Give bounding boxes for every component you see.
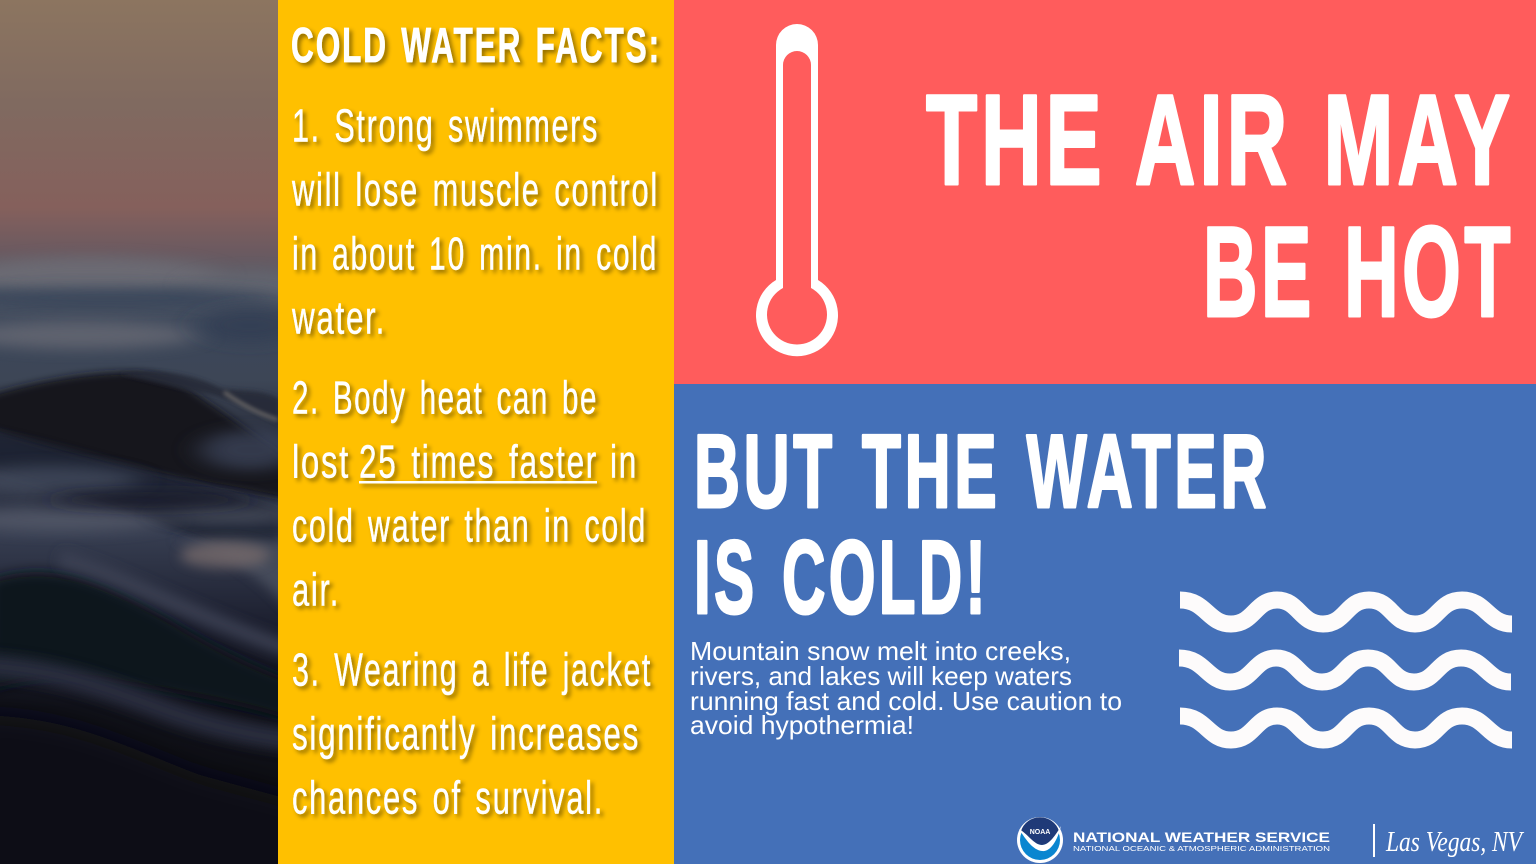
- icon: thermometer: [756, 24, 838, 356]
- text block: mountain snow melt: running fast and cold. Use caution to: [690, 686, 1122, 716]
- text block: national weather service: NATIONAL WEATHER SERVICE: [1073, 829, 1330, 845]
- panel: water photo: [0, 0, 278, 864]
- heading: cold water facts: COLD WATER FACTS:: [291, 19, 661, 73]
- heading: but the water is cold: IS COLD!: [694, 520, 989, 636]
- text block: national weather service: NATIONAL OCEANIC & ATMOSPHERIC ADMINISTRATION: [1073, 844, 1330, 853]
- fact 2: air.: [292, 564, 340, 616]
- fact 1: in about 10 min. in cold: [292, 228, 658, 280]
- fact 2: 25 times faster: [359, 436, 598, 488]
- fact 3: chances of survival.: [292, 772, 604, 824]
- text block: mountain snow melt: avoid hypothermia!: [690, 710, 914, 740]
- fact 1: [291, 100, 659, 344]
- heading: the air may be hot: [926, 69, 1514, 344]
- fact 3: [292, 644, 652, 824]
- text block: mountain snow melt: [690, 636, 1122, 740]
- fact 2: lost: [292, 436, 350, 488]
- panel: blue water panel background: [674, 384, 1536, 864]
- text block: cold water facts: [291, 19, 661, 824]
- text block: national weather service: [1073, 829, 1330, 853]
- text block: mountain snow melt: Mountain snow melt into creeks,: [690, 636, 1071, 666]
- heading: but the water is cold: [694, 414, 1270, 636]
- fact 1: water.: [291, 292, 386, 344]
- fact 2: in: [610, 436, 638, 488]
- fact 2: [292, 372, 647, 616]
- fact 2: cold water than in cold: [292, 500, 647, 552]
- icon: NOAA logo: NOAA: [1030, 829, 1050, 836]
- fact 1: 1. Strong swimmers: [292, 100, 599, 152]
- panel: yellow facts background: [278, 0, 674, 864]
- icon: NOAA logo: [1017, 817, 1063, 863]
- fact 2: 2. Body heat can be: [292, 372, 598, 424]
- panel: red air panel background: [674, 0, 1536, 384]
- fact 1: will lose muscle control: [291, 164, 659, 216]
- fact 3: 3. Wearing a life jacket: [292, 644, 652, 696]
- icon: water waves: [1179, 600, 1512, 740]
- text block: mountain snow melt: rivers, and lakes will keep waters: [690, 661, 1072, 691]
- fact 3: significantly increases: [292, 708, 640, 760]
